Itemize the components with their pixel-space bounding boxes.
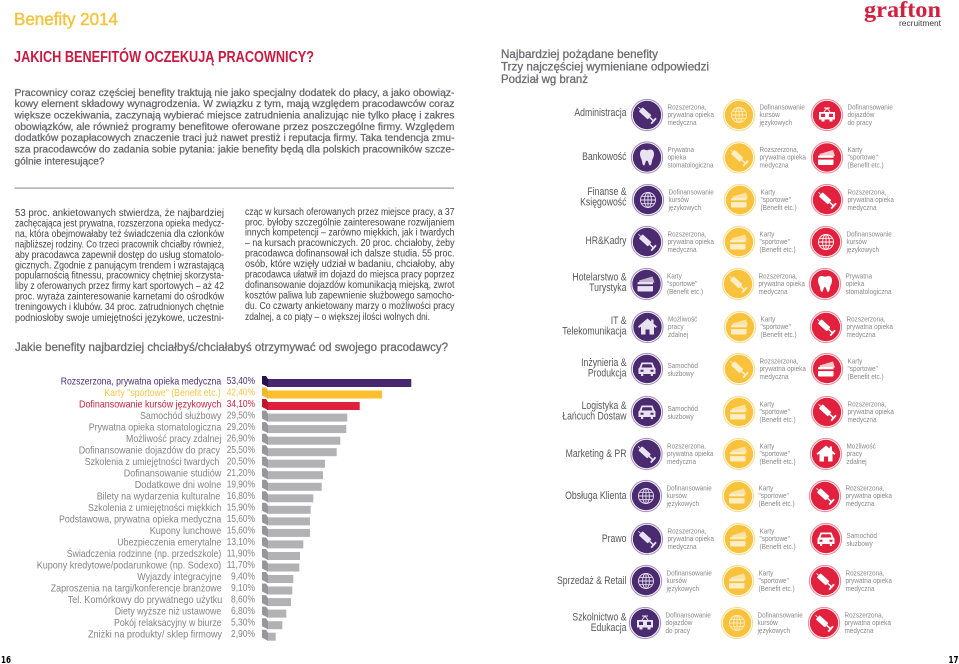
benefit: prywatna opieka medyczna: prywatna opieka: [760, 366, 806, 373]
article text: left column: proc. wyraża zainteresowanie karnetami do ośrodków: [15, 292, 225, 302]
chart labels: Tel. Komórkowy do prywatnego użytku: [68, 594, 222, 606]
article text: left column: treningowych i klubów. 34 proc. zatrudnionych chętnie: [15, 302, 224, 313]
chart values: 6,80%: [231, 605, 255, 617]
benefit: karty sportowe: [723, 226, 796, 258]
row: Inżynieria & Produkcja: Produkcja: [588, 368, 627, 380]
right panel heading: Najbardziej pożądane benefity: [501, 47, 658, 61]
benefit: praca zdalna: pracy: [668, 324, 684, 331]
benefit: praca zdalna: [632, 311, 698, 343]
benefit: dojazdy do pracy: Dofinansowanie: [666, 612, 711, 620]
benefit: dojazdy do pracy: do pracy: [848, 120, 872, 127]
benefit: prywatna opieka medyczna: medyczna: [846, 586, 875, 593]
benefit: samochód służbowy: [631, 396, 698, 428]
benefit: prywatna opieka medyczna: prywatna opieka: [667, 451, 713, 458]
benefit: karty sportowe: "sportowe": [760, 239, 790, 246]
row: Prawo: Prawo: [602, 533, 626, 545]
benefit: opieka stomatologiczna: stomatologiczna: [846, 289, 892, 296]
row: Administracja: [574, 99, 893, 131]
benefit: prywatna opieka medyczna: medyczna: [848, 205, 877, 212]
benefit: karty sportowe: (Benefit etc.): [760, 459, 796, 466]
chart values: 42,40%: [227, 386, 255, 398]
chart values: 15,90%: [227, 502, 255, 514]
benefit: kursy językowe: kursów: [666, 578, 688, 585]
right panel heading: Trzy najczęściej wymieniane odpowiedzi: [501, 60, 709, 74]
benefit: karty sportowe: Karty: [760, 443, 775, 451]
benefit: prywatna opieka medyczna: [809, 480, 892, 512]
benefit: karty sportowe: (Benefit etc.): [760, 544, 796, 551]
benefit: kursy językowe: Dofinansowanie: [666, 485, 712, 493]
chart labels: Kupony kredytowe/podarunkowe (np. Sodexo): [37, 560, 221, 572]
benefit: dojazdy do pracy: dojazdów: [848, 112, 875, 119]
benefit: prywatna opieka medyczna: [810, 311, 893, 343]
article text: right column: pracodawca ułatwił im dojazd do miejsca pracy poprzez: [245, 270, 454, 280]
article text: right column: [245, 207, 455, 323]
benefit: karty sportowe: [722, 480, 795, 512]
row: Finanse & Księgowość: Księgowość: [580, 197, 627, 209]
benefit: kursy językowe: kursów: [758, 620, 779, 627]
row: Hotelarstwo & Turystyka: Hotelarstwo &: [572, 272, 627, 284]
benefit: opieka stomatologiczna: Prywatna: [668, 147, 694, 154]
benefit: prywatna opieka medyczna: prywatna opieka: [760, 154, 806, 162]
benefit: karty sportowe: Karty: [760, 401, 775, 409]
benefit: kursy językowe: językowych: [759, 120, 792, 127]
row: Bankowość: Bankowość: [582, 151, 627, 163]
benefit: samochód służbowy: [631, 353, 698, 385]
chart labels: Możliwość pracy zdalnej: [126, 433, 221, 445]
row: Marketing & PR: [566, 438, 876, 470]
logo: grafton recruitment: recruitment: [899, 18, 942, 28]
benefit: praca zdalna: Możliwość: [846, 443, 876, 451]
benefit: karty sportowe: Karty: [760, 231, 775, 239]
chart values: 13,10%: [227, 536, 255, 548]
article text: right column: zdalnej, a co piąty – o większej ilości wolnych dni.: [245, 312, 430, 323]
benefit: kursy językowe: Dofinansowanie: [668, 189, 714, 197]
article text: left column: zachęcająca jest prywatna, rozszerzona opieka medycz-: [15, 218, 224, 230]
intro text block: obowiązków, ale również programy benefitowe oferowane przez poszczególne firmy. Względem: [14, 122, 454, 133]
benefit: praca zdalna: zdalnej: [668, 332, 689, 339]
chart values: 2,90%: [231, 628, 255, 640]
intro text block: gólnie interesujące?: [14, 156, 105, 168]
benefit: prywatna opieka medyczna: medyczna: [846, 332, 876, 339]
article text: left column: popularnością fitnessu, pracownicy chętniej skorzysta-: [15, 270, 224, 282]
chart values: 9,10%: [231, 582, 255, 594]
benefit: karty sportowe: Karty: [667, 273, 682, 281]
article text: right column: innych kompetencji – zarówno miękkich, jak i twardych: [245, 228, 454, 238]
intro text block: dodatków pozapłacowych znaczenie traci już nawet prestiż i reputacja firmy. Taka tendencja zmu-: [14, 133, 455, 144]
benefit: karty sportowe: Karty: [848, 358, 863, 366]
benefit: prywatna opieka medyczna: Rozszerzona,: [848, 401, 886, 409]
benefit: prywatna opieka medyczna: [631, 99, 714, 131]
benefit: kursy językowe: Dofinansowanie: [846, 231, 892, 239]
benefit: opieka stomatologiczna: [631, 142, 714, 173]
right panel heading: [501, 47, 709, 86]
article text: left column: podniosłoby swoje umiejętności językowe, uczestni-: [15, 313, 224, 324]
benefit: samochód służbowy: służbowy: [668, 413, 694, 421]
benefit: kursy językowe: Dofinansowanie: [666, 570, 712, 578]
benefit: prywatna opieka medyczna: medyczna: [668, 120, 697, 127]
benefit: prywatna opieka medyczna: medyczna: [668, 544, 697, 551]
benefit: kursy językowe: językowych: [666, 586, 699, 593]
row: Hotelarstwo & Turystyka: [572, 268, 892, 300]
article text: right column: proc. byłoby szczególnie zainteresowane rozwijaniem: [245, 218, 454, 228]
benefit: kursy językowe: językowych: [668, 205, 701, 212]
chart values: 20,50%: [227, 456, 255, 468]
chart values: 8,60%: [231, 594, 255, 606]
chart labels: Kupony lunchowe: [150, 525, 221, 537]
benefit: prywatna opieka medyczna: prywatna opieka: [848, 197, 894, 204]
row: Finanse & Księgowość: Finanse &: [587, 186, 627, 198]
benefit: kursy językowe: kursów: [760, 112, 781, 119]
benefit: kursy językowe: [721, 607, 803, 639]
benefit: samochód służbowy: Samochód: [668, 405, 698, 413]
row: Szkolnictwo & Edukacja: [572, 607, 891, 639]
row: Obsługa Klienta: [565, 480, 892, 512]
benefit: opieka stomatologiczna: Prywatna: [846, 273, 872, 281]
chart labels: [37, 376, 223, 640]
benefit: prywatna opieka medyczna: Rozszerzona,: [668, 104, 706, 112]
benefit: kursy językowe: kursów: [666, 493, 688, 500]
benefit: opieka stomatologiczna: stomatologiczna: [668, 162, 714, 170]
chart values: 26,90%: [227, 432, 255, 444]
chart values: 34,10%: [227, 398, 255, 410]
chart heading: Jakie benefity najbardziej chciałbyś/chciałabyś otrzymywać od swojego pracodawcy?: [15, 340, 448, 354]
chart values: 53,40%: [227, 375, 255, 387]
benefit: samochód służbowy: służbowy: [846, 540, 873, 548]
chart values: 5,30%: [231, 616, 255, 628]
chart labels: Wyjazdy integracyjne: [137, 571, 222, 583]
row: Szkolnictwo & Edukacja: Edukacja: [591, 622, 627, 634]
benefit: prywatna opieka medyczna: medyczna: [758, 289, 788, 296]
benefit: prywatna opieka medyczna: [631, 523, 714, 555]
benefit: dojazdy do pracy: dojazdów: [666, 620, 693, 627]
chart values: 29,50%: [227, 410, 255, 422]
row: Inżynieria & Produkcja: [581, 353, 884, 385]
benefit: prywatna opieka medyczna: prywatna opieka: [668, 239, 714, 246]
intro text block: Pracownicy coraz częściej benefity traktują nie jako specjalny dodatek do płacy, a jako obowiąz-: [14, 88, 454, 99]
benefit: prywatna opieka medyczna: Rozszerzona,: [668, 528, 706, 536]
article text: left column: 53 proc. ankietowanych stwierdza, że najbardziej: [15, 208, 224, 219]
chart values: [227, 375, 255, 640]
chart labels: Zniżki na produkty/ sklep firmowy: [88, 628, 223, 640]
chart labels: Dodatkowe dni wolne: [135, 479, 221, 491]
chart labels: Dofinansowanie dojazdów do pracy: [79, 444, 221, 456]
benefit: karty sportowe: (Benefit etc.): [848, 162, 884, 170]
benefit: karty sportowe: (Benefit etc.): [758, 501, 795, 508]
row: HR&Kadry: [585, 226, 892, 258]
row: Finanse & Księgowość: [580, 184, 894, 216]
benefit: dojazdy do pracy: do pracy: [666, 628, 690, 635]
row: IT & Telekomunikacja: [562, 311, 893, 343]
benefit: prywatna opieka medyczna: medyczna: [760, 374, 789, 381]
benefit: kursy językowe: [810, 226, 892, 258]
row: Szkolnictwo & Edukacja: Szkolnictwo &: [572, 612, 627, 624]
benefit: prywatna opieka medyczna: prywatna opieka: [668, 536, 714, 543]
chart labels: Zaproszenia na targi/konferencje branżowe: [51, 582, 222, 594]
row: Sprzedaż & Retail: Sprzedaż & Retail: [557, 575, 626, 587]
chart values: 15,60%: [227, 513, 255, 525]
benefit: prywatna opieka medyczna: Rozszerzona,: [667, 443, 706, 451]
benefit: karty sportowe: [723, 438, 796, 470]
benefit: dojazdy do pracy: Dofinansowanie: [848, 104, 893, 112]
benefit: karty sportowe: (Benefit etc.): [667, 289, 703, 296]
benefit: karty sportowe: (Benefit etc.): [760, 247, 796, 254]
article text: right column: cząc w kursach oferowanych przez miejsce pracy, a 37: [245, 207, 455, 218]
benefit: prywatna opieka medyczna: prywatna opieka: [846, 324, 893, 331]
benefit: kursy językowe: [632, 184, 714, 216]
article text: right column: kosztów paliwa lub zapewnienie służbowego samocho-: [245, 290, 454, 302]
benefit: prywatna opieka medyczna: Rozszerzona,: [758, 273, 797, 281]
benefit: prywatna opieka medyczna: medyczna: [846, 501, 875, 508]
benefit: dojazdy do pracy: [811, 99, 893, 131]
benefit: karty sportowe: Karty: [760, 316, 776, 324]
benefit: karty sportowe: [723, 396, 796, 428]
chart labels: Podstawowa, prywatna opieka medyczna: [59, 514, 221, 526]
benefit: kursy językowe: [630, 565, 712, 597]
benefit: prywatna opieka medyczna: medyczna: [844, 628, 874, 635]
intro text block: kowy element składowy wynagrodzenia. W związku z tym, mają względem pracodawców coraz: [14, 99, 454, 110]
row: IT & Telekomunikacja: IT &: [611, 315, 627, 327]
benefit: praca zdalna: zdalnej: [846, 459, 867, 466]
benefit: prywatna opieka medyczna: [811, 396, 894, 428]
benefit: opieka stomatologiczna: [809, 268, 892, 300]
chart values: 11,70%: [227, 559, 255, 571]
benefit: kursy językowe: [723, 99, 805, 131]
chart labels: Karty "sportowe" (Benefit etc.): [104, 387, 221, 399]
benefit: prywatna opieka medyczna: [811, 184, 894, 216]
benefit: prywatna opieka medyczna: Rozszerzona,: [846, 316, 885, 324]
benefit: karty sportowe: Karty: [848, 147, 863, 154]
benefit: karty sportowe: "sportowe": [758, 578, 789, 585]
chart values: 19,90%: [227, 478, 255, 490]
benefit: opieka stomatologiczna: opieka: [846, 281, 864, 288]
title: JAKICH BENEFITÓW OCZEKUJĄ PRACOWNICY?: [14, 48, 314, 66]
benefit: prywatna opieka medyczna: prywatna opieka: [844, 620, 891, 627]
benefit: prywatna opieka medyczna: [722, 268, 805, 300]
chart labels: Ubezpieczenia emerytalne: [117, 536, 221, 548]
chart values: 9,40%: [231, 570, 255, 582]
benefit: samochód służbowy: Samochód: [668, 362, 698, 370]
benefit: kursy językowe: Dofinansowanie: [758, 612, 803, 620]
chart values: 29,20%: [227, 421, 255, 433]
row: Administracja: Administracja: [574, 107, 627, 119]
row: Obsługa Klienta: Obsługa Klienta: [565, 490, 627, 502]
row: Logistyka & Łańcuch Dostaw: [562, 396, 894, 428]
benefit: prywatna opieka medyczna: [723, 353, 806, 385]
benefit: prywatna opieka medyczna: prywatna opieka: [668, 112, 714, 119]
benefit: karty sportowe: Karty: [760, 528, 775, 536]
benefit: kursy językowe: kursów: [668, 197, 690, 204]
benefit: karty sportowe: (Benefit etc.): [758, 586, 795, 593]
row: Hotelarstwo & Turystyka: Turystyka: [589, 282, 627, 294]
benefit: prywatna opieka medyczna: [631, 226, 714, 258]
chart labels: Rozszerzona, prywatna opieka medyczna: [61, 376, 221, 388]
benefit: karty sportowe: "sportowe": [760, 324, 791, 331]
benefit: praca zdalna: pracy: [846, 451, 863, 458]
benefit: prywatna opieka medyczna: Rozszerzona,: [844, 612, 883, 620]
benefit: prywatna opieka medyczna: Rozszerzona,: [846, 570, 884, 578]
benefit: karty sportowe: Karty: [758, 485, 774, 493]
article text: left column: gicznych. Zgodnie z panującym trendem i wzrastającą: [15, 260, 224, 272]
chart labels: Pokój relaksacyjny w biurze: [114, 617, 222, 629]
benefit: karty sportowe: [811, 142, 884, 173]
benefit: praca zdalna: Możliwość: [668, 316, 698, 324]
benefit: prywatna opieka medyczna: medyczna: [848, 417, 877, 424]
article text: left column: [15, 208, 225, 324]
row: Inżynieria & Produkcja: Inżynieria &: [581, 357, 627, 369]
benefit: samochód służbowy: Samochód: [846, 532, 877, 540]
benefit: karty sportowe: "sportowe": [760, 197, 791, 204]
chart labels: Bilety na wydarzenia kulturalne: [97, 490, 220, 502]
chart values: 16,80%: [227, 490, 255, 502]
article text: right column: – na kursach pracowniczych. 20 proc. chciałoby, żeby: [245, 238, 454, 249]
row: Bankowość: [582, 142, 884, 173]
benefit: karty sportowe: "sportowe": [760, 536, 790, 543]
benefit: karty sportowe: "sportowe": [667, 281, 698, 288]
benefit: prywatna opieka medyczna: Rozszerzona,: [848, 189, 886, 197]
row: Sprzedaż & Retail: [557, 565, 892, 597]
chart labels: Diety wyższe niż ustawowe: [115, 606, 221, 618]
chart values: 21,20%: [227, 467, 255, 479]
benefit: praca zdalna: [810, 438, 876, 470]
row: Marketing & PR: Marketing & PR: [566, 448, 626, 460]
article text: left column: aby pracodawca zapewnił dostęp do usług stomatolo-: [15, 250, 224, 261]
benefit: karty sportowe: (Benefit etc.): [760, 417, 796, 424]
benefit: prywatna opieka medyczna: [809, 565, 892, 597]
benefit: prywatna opieka medyczna: [631, 438, 713, 470]
chart values: 25,50%: [227, 444, 255, 456]
benefit: karty sportowe: "sportowe": [760, 451, 790, 458]
benefit: kursy językowe: językowych: [757, 628, 790, 635]
chart bars: [262, 376, 411, 641]
benefit: kursy językowe: językowych: [666, 501, 699, 508]
benefit: prywatna opieka medyczna: prywatna opieka: [758, 281, 805, 288]
chart labels: Samochód służbowy: [140, 410, 222, 422]
benefit: kursy językowe: Dofinansowanie: [760, 104, 805, 112]
chart labels: Świadczenia rodzinne (np. przedszkole): [67, 547, 221, 560]
chart values: 11,90%: [227, 548, 255, 560]
benefit: prywatna opieka medyczna: prywatna opieka: [846, 493, 892, 500]
benefit: karty sportowe: Karty: [758, 570, 774, 578]
benefit: prywatna opieka medyczna: Rozszerzona,: [846, 485, 884, 493]
benefit: karty sportowe: "sportowe": [758, 493, 789, 500]
row: IT & Telekomunikacja: Telekomunikacja: [562, 326, 627, 338]
benefit: karty sportowe: "sportowe": [848, 366, 878, 373]
benefit: prywatna opieka medyczna: medyczna: [760, 162, 789, 170]
chart labels: Prywatna opieka stomatologiczna: [89, 422, 221, 434]
article text: right column: dofinansowanie dojazdów komunikacją miejską, zwrot: [245, 280, 455, 291]
benefit: karty sportowe: "sportowe": [760, 409, 790, 416]
chart labels: Dofinansowanie studiów: [124, 468, 222, 480]
benefit: karty sportowe: (Benefit etc.): [848, 374, 884, 381]
right panel heading: Podział wg branż: [501, 72, 588, 86]
benefit: dojazdy do pracy: [629, 607, 711, 639]
bar chart: desired benefits: [37, 375, 411, 641]
benefit: karty sportowe: [811, 353, 884, 385]
benefit: kursy językowe: językowych: [846, 247, 879, 254]
row: Logistyka & Łańcuch Dostaw: Łańcuch Dostaw: [562, 411, 627, 423]
chart labels: Szkolenia z umiejętności miękkich: [88, 502, 221, 514]
benefit: karty sportowe: [722, 565, 795, 597]
benefit: karty sportowe: [724, 311, 797, 343]
benefit: prywatna opieka medyczna: prywatna opieka: [848, 409, 894, 416]
benefit: karty sportowe: [723, 523, 796, 555]
intro text block: [13, 88, 455, 168]
intro text block: sza pracodawców do zadania sobie pytania: jakie benefity będą dla polskich pracowników szcze-: [14, 144, 454, 156]
article text: right column: osób, które wzięły udział w badaniu, chciałoby, aby: [245, 259, 454, 270]
benefit: karty sportowe: Karty: [760, 189, 776, 197]
benefit: opieka stomatologiczna: opieka: [668, 154, 686, 162]
benefit: karty sportowe: "sportowe": [848, 154, 878, 162]
benefit: prywatna opieka medyczna: medyczna: [668, 247, 697, 254]
benefit: prywatna opieka medyczna: prywatna opieka: [846, 578, 892, 585]
benefit: samochód służbowy: [810, 523, 877, 555]
benefit: prywatna opieka medyczna: Rozszerzona,: [760, 147, 798, 154]
benefit: karty sportowe: [631, 268, 703, 300]
chart values: 15,60%: [227, 524, 255, 536]
article text: right column: pracodawca dofinansował ich dalsze studia. 55 proc.: [245, 248, 454, 260]
article text: left column: na, która obejmowałaby też świadczenia dla członków: [15, 229, 225, 240]
benefit: karty sportowe: (Benefit etc.): [760, 205, 797, 212]
benefit: prywatna opieka medyczna: Rozszerzona,: [668, 231, 706, 239]
article text: right column: du. Co czwarty ankietowany marzy o możliwości pracy: [245, 301, 454, 312]
intro text block: większe oczekiwania, zaczynają wybierać miejsce zatrudnienia analizując nie tylko płacę i zakres: [13, 110, 454, 122]
article text: left column: liby z oferowanych przez firmy kart sportowych – aż 42: [15, 281, 224, 292]
benefit: prywatna opieka medyczna: Rozszerzona,: [760, 358, 798, 366]
benefit: karty sportowe: [724, 184, 797, 216]
benefit: samochód służbowy: służbowy: [668, 370, 694, 378]
article text: left column: najbliższej rodziny. Co trzeci pracownik chciałby również,: [15, 240, 224, 250]
benefit: karty sportowe: (Benefit etc.): [760, 332, 797, 339]
benefit: kursy językowe: kursów: [846, 239, 868, 246]
benefit: prywatna opieka medyczna: [723, 142, 806, 173]
chart labels: Dofinansowanie kursów językowych: [79, 398, 221, 410]
benefit: prywatna opieka medyczna: medyczna: [667, 459, 696, 466]
benefit: kursy językowe: [630, 480, 712, 512]
row: HR&Kadry: HR&Kadry: [585, 235, 627, 247]
row: Prawo: [602, 523, 877, 555]
benefit: prywatna opieka medyczna: [808, 607, 891, 639]
chart labels: Szkolenia z umiejętności twardych: [85, 456, 219, 468]
page header: Benefity 2014: Benefity 2014: [14, 9, 118, 29]
row: Logistyka & Łańcuch Dostaw: Logistyka &: [582, 400, 627, 412]
